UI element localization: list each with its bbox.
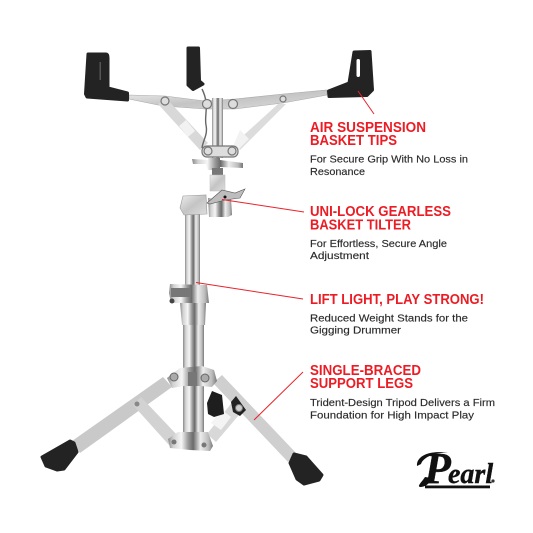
center post [212, 98, 223, 158]
callout text: air suspension basket tips: BASKET TIPS [310, 133, 397, 149]
right foot [290, 454, 322, 484]
callout text: single-braced support legs: Trident-Design Tripod Delivers a Firm [310, 397, 495, 409]
wing nut [192, 158, 243, 170]
callout text: lift light, play strong: LIFT LIGHT, PLAY STRONG! [310, 292, 484, 308]
basket bolts [161, 96, 286, 157]
callout line: legs [254, 372, 303, 420]
callout text: uni-lock gearless basket tilter: For Effortless, Secure Angle [310, 238, 447, 250]
uni-lock tilter body [180, 189, 245, 217]
callout text: air suspension basket tips [310, 120, 468, 178]
callout text: lift light, play strong: Reduced Weight Stands for the [310, 312, 468, 324]
bottom bracket [168, 432, 213, 451]
callout text: single-braced support legs [310, 363, 495, 422]
callout text: uni-lock gearless basket tilter [310, 204, 451, 262]
callout text: air suspension basket tips: For Secure Grip With No Loss in [310, 154, 468, 166]
callout line: lift light [196, 282, 303, 299]
cone collar [180, 303, 206, 325]
top leg bracket [167, 366, 217, 388]
callout line: basket tips [358, 91, 374, 114]
left basket tip [86, 54, 128, 100]
right basket tip [328, 52, 372, 96]
tilter neck [212, 168, 223, 176]
leg bracket plate [231, 396, 246, 416]
callout text: uni-lock gearless basket tilter: Adjustment [310, 250, 369, 262]
callout text: single-braced support legs: Foundation for High Impact Play [310, 410, 475, 422]
callout text: single-braced support legs: SINGLE-BRACED [310, 363, 421, 379]
callout line: tilter [222, 200, 304, 212]
callout text: uni-lock gearless basket tilter: BASKET TILTER [310, 218, 411, 234]
upper tube [185, 212, 200, 287]
Pearl logo [417, 444, 495, 493]
Pearl logo: P [423, 444, 452, 493]
callout text: lift light, play strong [310, 292, 484, 336]
callout text: lift light, play strong: Gigging Drummer [310, 324, 402, 336]
snare stand illustration [42, 48, 372, 484]
callout text: air suspension basket tips: AIR SUSPENSION [310, 120, 426, 136]
callout text: uni-lock gearless basket tilter: UNI-LOCK GEARLESS [310, 204, 451, 220]
Pearl logo: earl [448, 459, 493, 490]
height clamp [169, 284, 209, 304]
wing bolt on leg [207, 391, 224, 417]
middle basket tip [188, 48, 203, 90]
left foot [42, 441, 77, 470]
basket wire [202, 89, 206, 148]
lower legs and braces [72, 375, 297, 462]
basket arms [129, 90, 327, 150]
callout text: single-braced support legs: SUPPORT LEGS [310, 376, 413, 392]
callout text: air suspension basket tips: Resonance [310, 166, 365, 178]
lower tube [183, 325, 204, 435]
